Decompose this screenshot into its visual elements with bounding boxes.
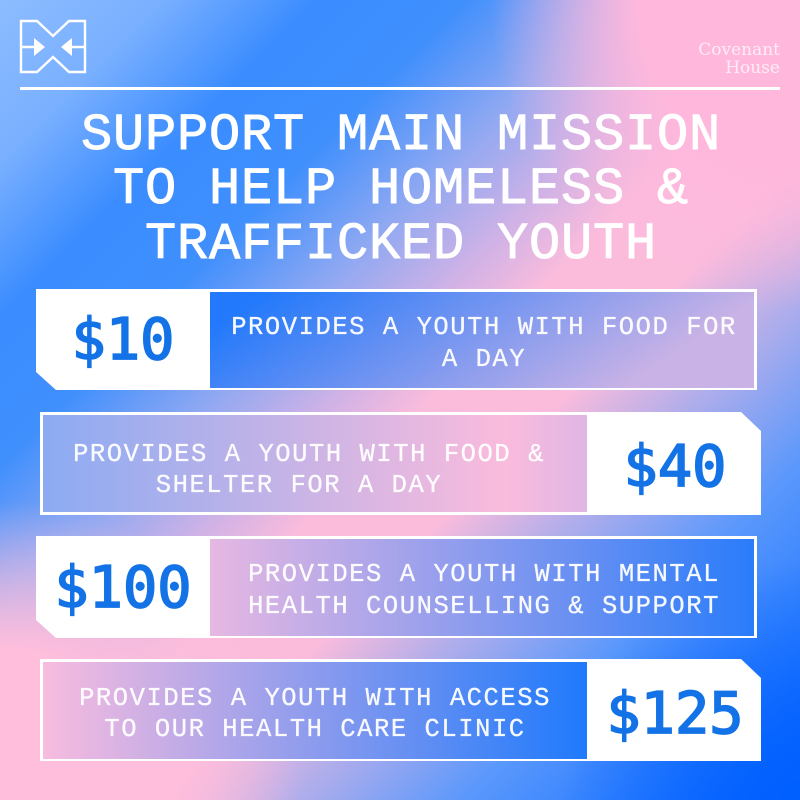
brand name [698,40,780,78]
row 2 description: PROVIDES A YOUTH WITH FOOD & [73,440,545,469]
row 1 description: A DAY [442,345,526,374]
title: TRAFFICKED YOUTH [145,215,657,274]
row 2 price: $40 [624,434,726,500]
brand name: House [725,58,780,78]
row 1 description [231,313,737,374]
row 4 price: $125 [606,681,744,747]
row: $40 [40,412,761,515]
title: SUPPORT MAIN MISSION [81,106,721,165]
title: TO HELP HOMELESS & [113,160,689,219]
row 4 description: TO OUR HEALTH CARE CLINIC [104,715,526,744]
logo icon [21,21,85,72]
row 2 description panel [43,415,587,512]
row: $100 [36,536,757,638]
row: $10 [36,289,757,390]
row 2 description [73,440,545,500]
row 3 price: $100 [54,555,192,621]
row 1 description: PROVIDES A YOUTH WITH FOOD FOR [231,313,737,342]
row 2 description: SHELTER FOR A DAY [156,471,442,500]
row 1 description panel [210,292,754,388]
row 4 description panel [43,662,587,759]
row 3 description: HEALTH COUNSELLING & SUPPORT [248,592,720,621]
row 1 price: $10 [72,307,174,373]
row 4 description [79,684,551,744]
brand name: Covenant [698,40,780,60]
row 3 description: PROVIDES A YOUTH WITH MENTAL [248,560,720,589]
row 3 description [248,560,720,621]
row: $125 [40,659,761,761]
title [81,106,721,274]
header rule [20,87,780,90]
row 3 description panel [210,539,754,636]
row 4 description: PROVIDES A YOUTH WITH ACCESS [79,684,551,713]
